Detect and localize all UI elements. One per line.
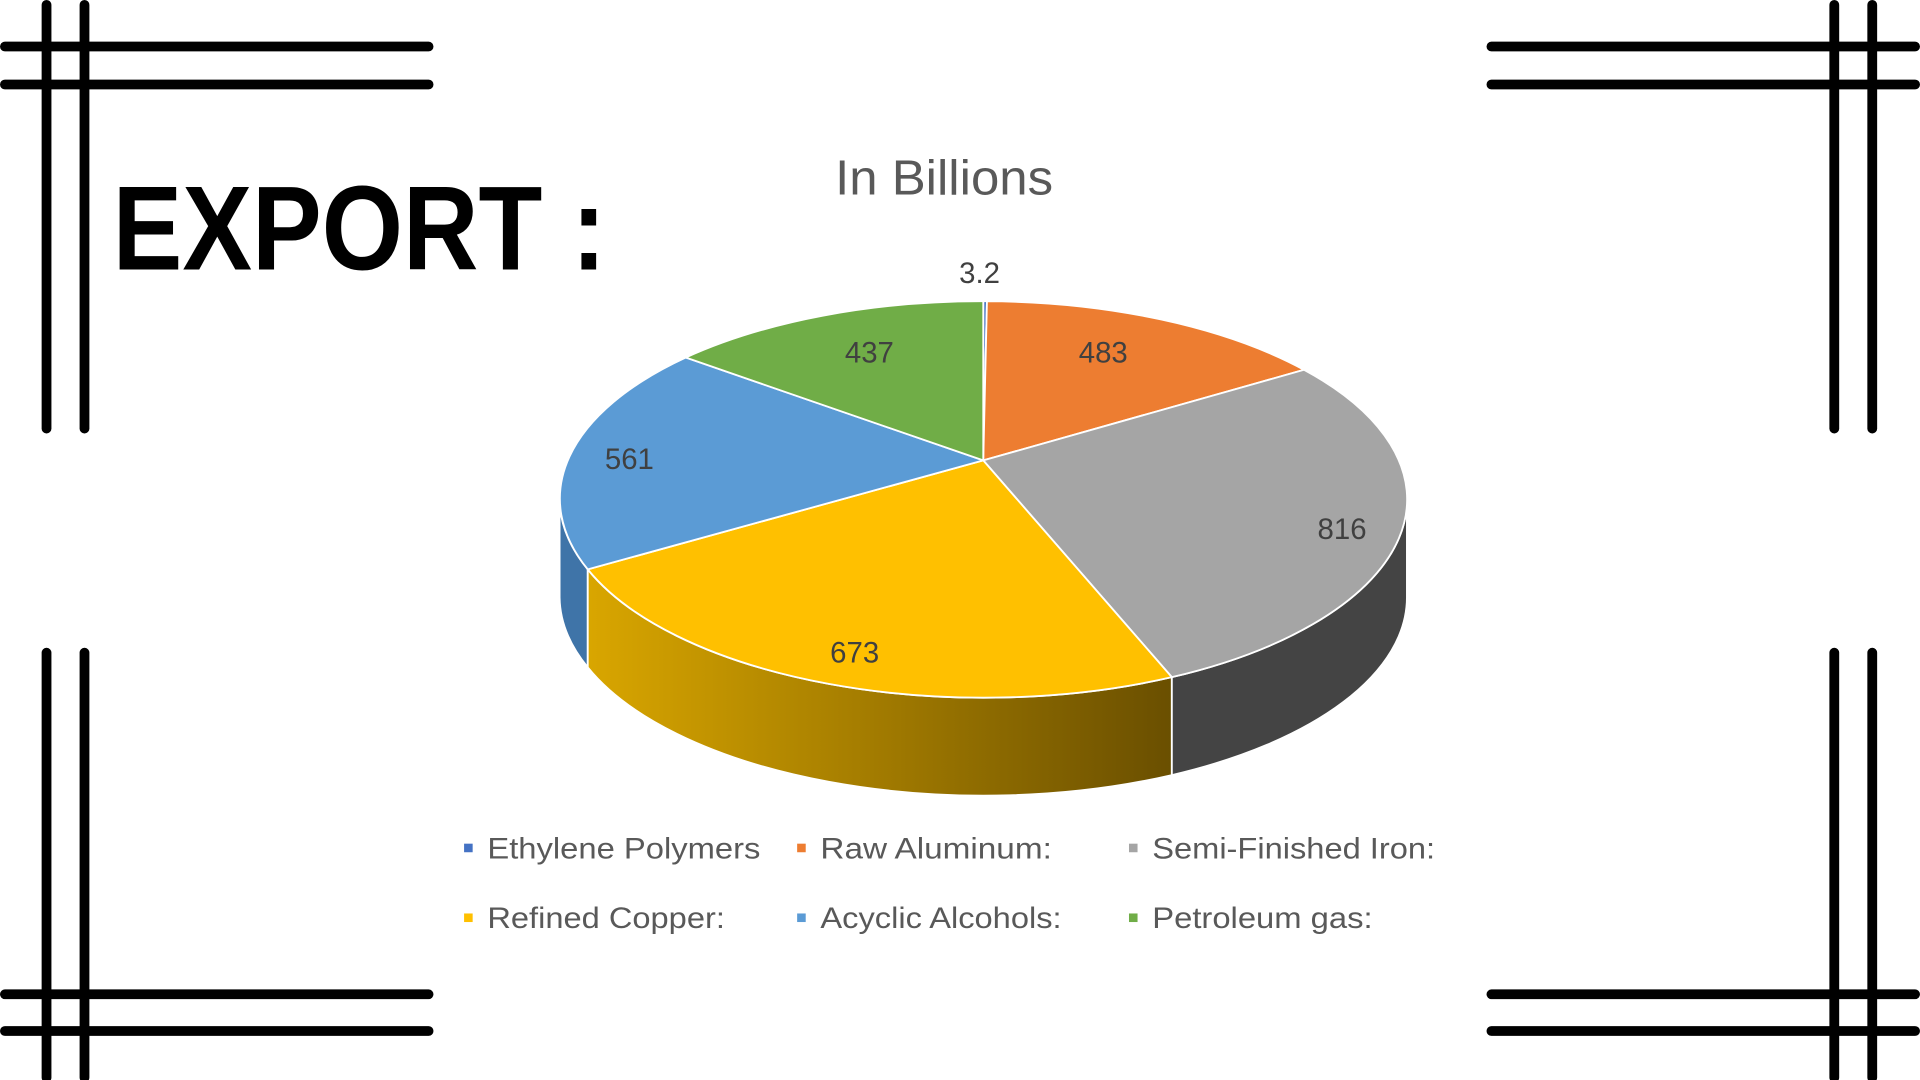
legend: Acyclic Alcohols: xyxy=(820,902,1062,935)
data labels: 561 xyxy=(605,443,654,476)
slices xyxy=(983,301,987,460)
chart title: In Billions xyxy=(835,152,1053,206)
data labels: 3.2 xyxy=(959,257,1000,290)
heading: EXPORT: EXPORT : xyxy=(113,161,606,295)
legend: Petroleum gas: xyxy=(1152,902,1373,935)
legend xyxy=(464,832,1435,935)
frame corner: bottom-right xyxy=(1491,653,1915,1078)
data labels: 437 xyxy=(845,336,894,369)
data labels: 816 xyxy=(1318,513,1367,546)
frame corner: top-left xyxy=(5,5,429,429)
data labels: 673 xyxy=(830,636,879,669)
legend: Raw Aluminum: xyxy=(820,832,1052,865)
side walls xyxy=(560,500,588,667)
legend: Semi-Finished Iron: xyxy=(1152,832,1435,865)
3D pie chart xyxy=(560,301,1407,796)
legend: Refined Copper: xyxy=(487,902,725,935)
frame corner: bottom-left xyxy=(5,653,429,1078)
data labels: 483 xyxy=(1079,336,1128,369)
frame corner: top-right xyxy=(1491,5,1915,429)
legend: Ethylene Polymers xyxy=(487,832,760,865)
data labels xyxy=(605,257,1367,669)
